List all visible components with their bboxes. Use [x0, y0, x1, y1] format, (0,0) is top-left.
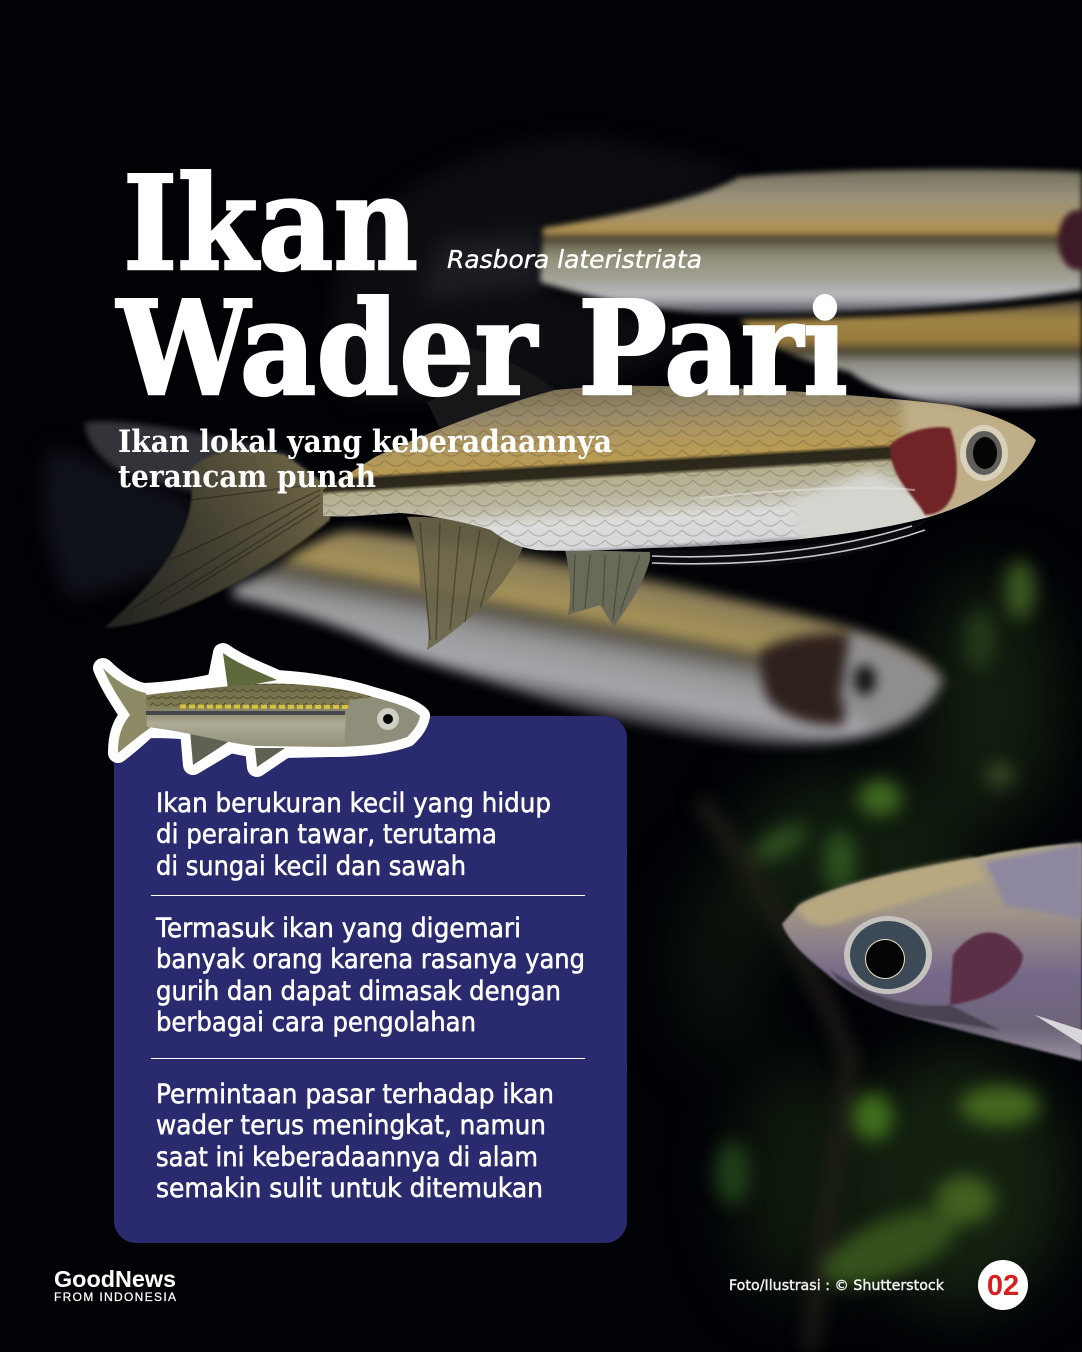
- subtitle: terancam punah: [118, 459, 376, 495]
- subtitle: [118, 424, 612, 495]
- heading: Wader Pari: Wader Pari: [115, 272, 848, 425]
- text block: description 3: wader terus meningkat, namun: [156, 1110, 546, 1141]
- text block: description 2: berbagai cara pengolahan: [156, 1007, 476, 1038]
- text block: description 2: [155, 913, 585, 1038]
- background haze: [680, 570, 1070, 1310]
- text block: description 1: di perairan tawar, terutama: [156, 819, 497, 850]
- text block: description 2: banyak orang karena rasanya yang: [156, 944, 585, 975]
- text block: description 3: [156, 1079, 554, 1204]
- text block: description 3: saat ini keberadaannya di alam: [156, 1142, 538, 1173]
- logo: GoodNews from Indonesia: [54, 1266, 176, 1304]
- text block: description 1: Ikan berukuran kecil yang hidup: [156, 788, 551, 819]
- species name: Rasbora lateristriata: [447, 245, 702, 274]
- text block: description 3: Permintaan pasar terhadap ikan: [156, 1079, 554, 1110]
- subtitle: Ikan lokal yang keberadaannya: [118, 424, 612, 460]
- text block: description 1: [156, 788, 551, 882]
- text block: description 2: Termasuk ikan yang digemari: [155, 913, 521, 944]
- text block: description 1: di sungai kecil dan sawah: [156, 851, 466, 882]
- photo credit: Foto/Ilustrasi : © Shutterstock: [729, 1278, 945, 1294]
- green plants: [700, 560, 1040, 1350]
- panel: description card: [114, 716, 627, 1243]
- page number badge: [978, 1260, 1028, 1310]
- text block: description 2: gurih dan dapat dimasak dengan: [156, 976, 561, 1007]
- fish: rear top: [540, 169, 1082, 408]
- heading: Ikan: Ikan: [123, 147, 418, 300]
- logo: GoodNews from Indonesia: GoodNews: [54, 1266, 176, 1292]
- logo: GoodNews from Indonesia: FROM INDONESIA: [54, 1290, 176, 1304]
- fish: rear lower: [233, 530, 943, 744]
- fish: main in focus: [85, 345, 1050, 650]
- icon: fish sticker: [103, 653, 420, 767]
- dim tails of rear fish: [43, 138, 745, 600]
- fish: large head, lower right: [782, 843, 1082, 1061]
- text block: description 3: semakin sulit untuk ditemukan: [156, 1173, 543, 1204]
- page number badge: 02: [987, 1270, 1019, 1302]
